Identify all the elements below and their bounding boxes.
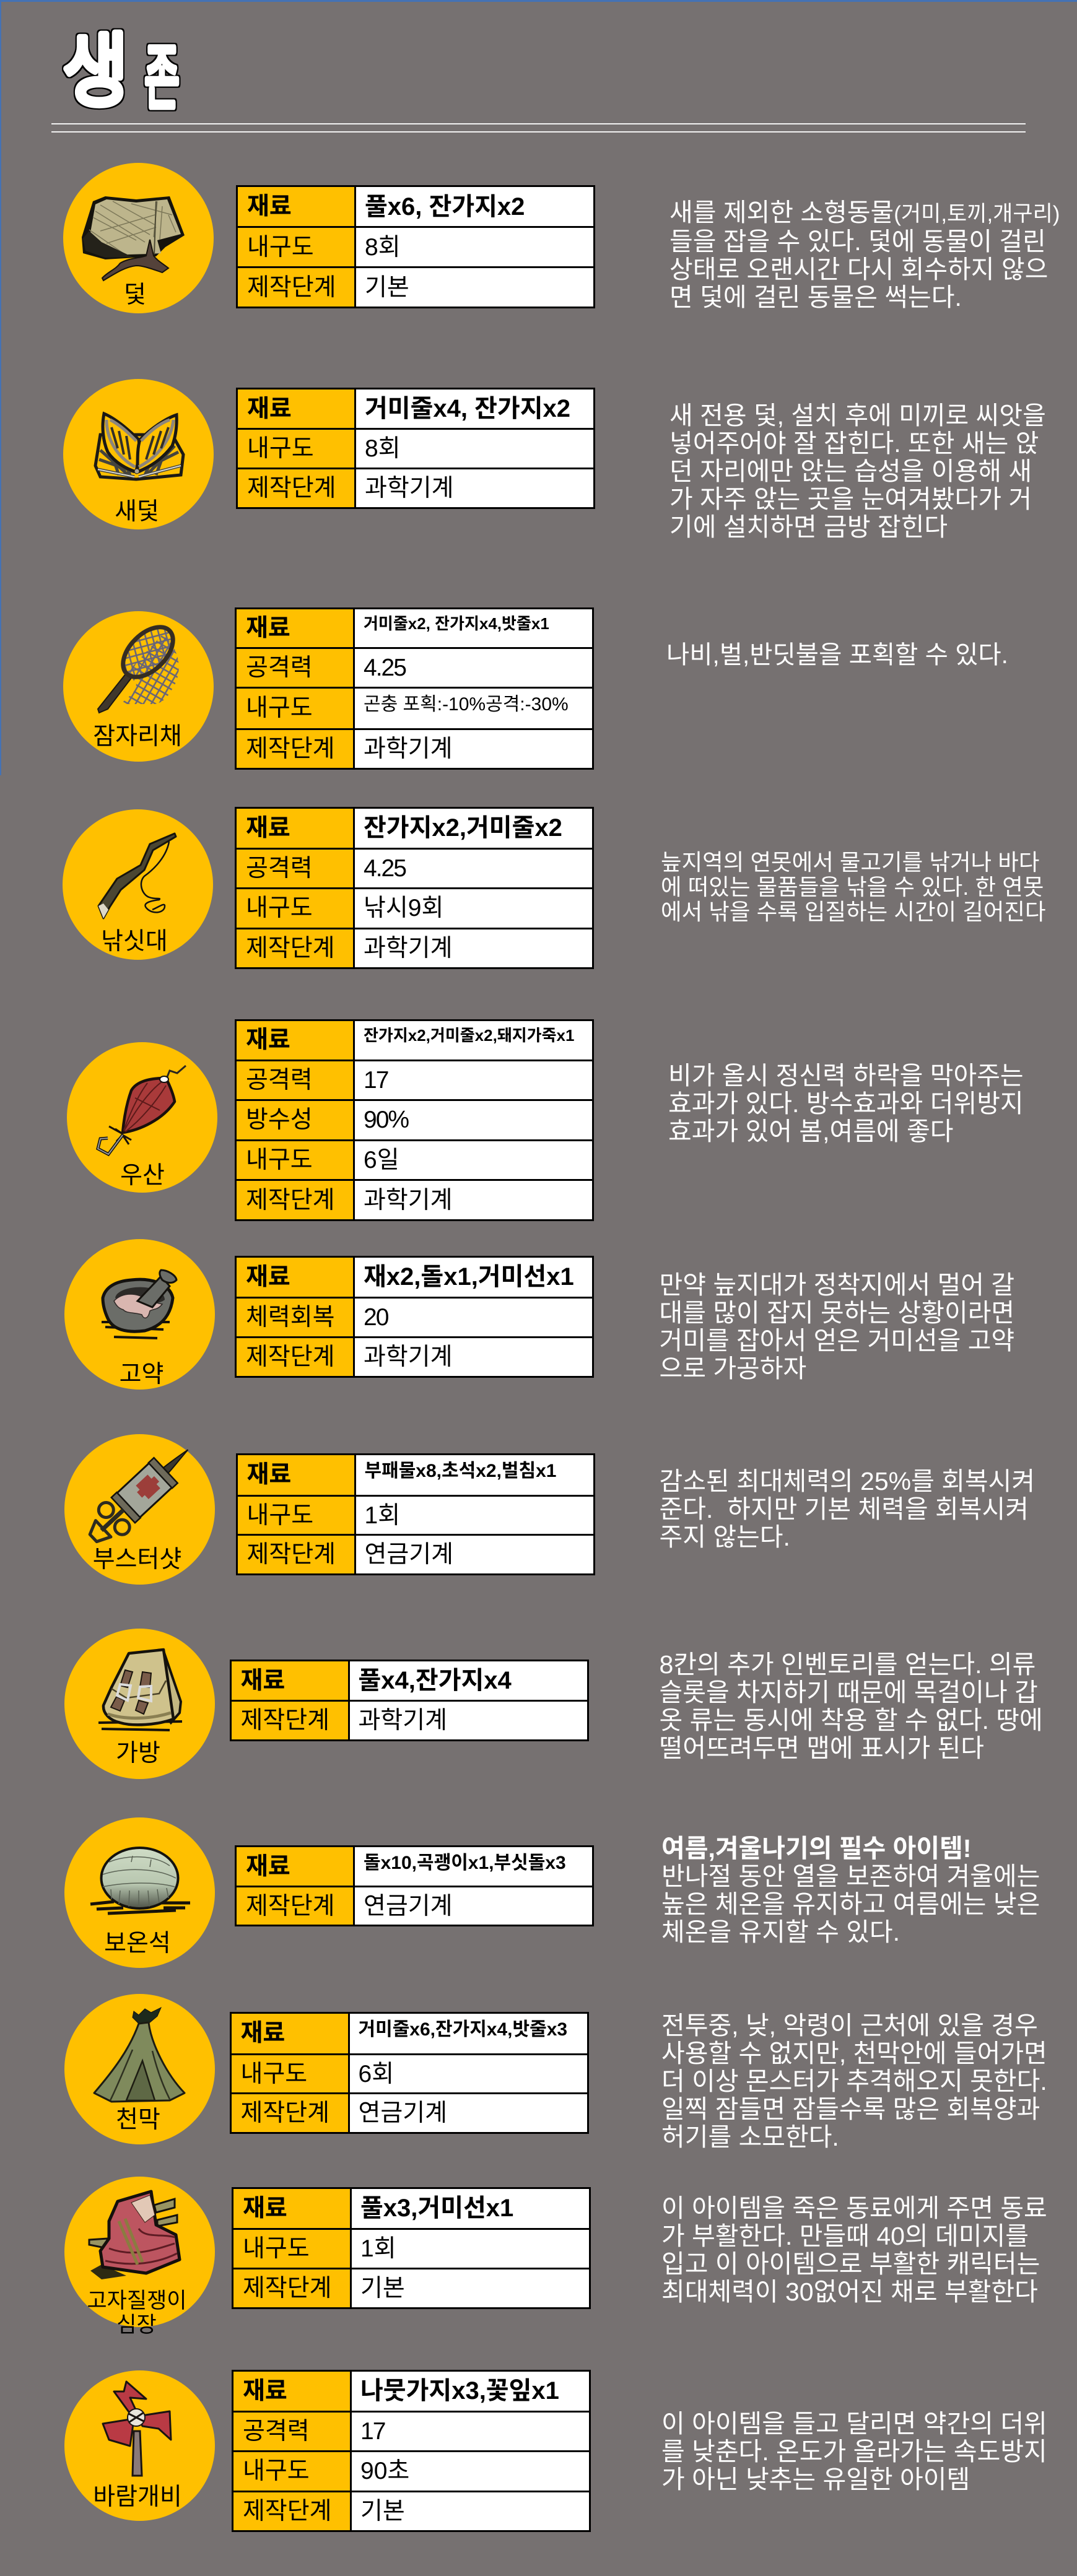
table: 가방: 재료 bbox=[240, 1668, 285, 1694]
icon badge: 가방 bbox=[64, 1629, 215, 1779]
label: 가방 bbox=[116, 1740, 160, 1767]
icon badge: 천막 bbox=[64, 1994, 215, 2144]
panel: 덫 bbox=[63, 163, 1060, 313]
table: 고자질쟁이 심장: 제작단계 bbox=[243, 2275, 332, 2302]
label: 천막 bbox=[116, 2107, 160, 2133]
icon badge: 낚싯대 bbox=[63, 809, 213, 960]
table: 부스터샷: 부패물x8,초석x2,벌침x1 bbox=[364, 1461, 556, 1481]
table: 바람개비: 나뭇가지x3,꽃잎x1 bbox=[360, 2377, 559, 2404]
table: 부스터샷: 1회 bbox=[364, 1502, 400, 1529]
table: 잠자리채: 거미줄x2, 잔가지x4,밧줄x1 bbox=[364, 614, 549, 633]
table: 바람개비: 재료 bbox=[243, 2378, 287, 2404]
table: 낚싯대: 낚시9회 bbox=[364, 895, 443, 921]
table: 부스터샷: 연금기계 bbox=[364, 1541, 453, 1568]
panel: 낚싯대 bbox=[63, 807, 1046, 969]
table: 낚싯대: 과학기계 bbox=[364, 935, 453, 962]
label: 덫 bbox=[124, 282, 146, 308]
panel: 고약 bbox=[64, 1239, 1014, 1390]
table: 보온석: 연금기계 bbox=[364, 1893, 453, 1920]
table: 고자질쟁이 심장: 재료 bbox=[243, 2195, 287, 2222]
label: 바람개비 bbox=[93, 2484, 181, 2510]
table: 낚싯대 bbox=[235, 807, 594, 969]
table: 우산: 6일 bbox=[364, 1147, 399, 1173]
table: 잠자리채: 4.25 bbox=[364, 655, 406, 681]
table: 낚싯대: 내구도 bbox=[246, 895, 313, 921]
table: 새덫: 과학기계 bbox=[365, 475, 454, 502]
title bbox=[62, 27, 181, 118]
table: 고자질쟁이 심장: 내구도 bbox=[243, 2235, 310, 2262]
table: 천막: 거미줄x6,잔가지x4,밧줄x3 bbox=[358, 2019, 567, 2040]
table: 잠자리채: 재료 bbox=[246, 615, 290, 642]
description: 새 전용 덫, 설치 후에 미끼로 씨앗을 넣어주어야 잘 잡힌다. 또한 새는 앉 던 자리에만 앉는 습성을 이용해 새 가 자주 앉는 곳을 눈여겨봤다가 거 기에 설치하면 금방 잡힌다 bbox=[669, 401, 1046, 541]
icon: fishing rod bbox=[98, 833, 176, 918]
table: 바람개비: 90초 bbox=[360, 2458, 409, 2484]
table: 낚싯대: 공격력 bbox=[246, 855, 313, 882]
icon: mortar and pestle bbox=[102, 1270, 176, 1338]
panel: 잠자리채 bbox=[63, 607, 1008, 770]
table: 우산: 제작단계 bbox=[246, 1187, 335, 1214]
table: 잠자리채: 내구도 bbox=[246, 695, 313, 721]
table: 보온석: 돌x10,곡괭이x1,부싯돌x3 bbox=[364, 1853, 566, 1873]
description: 이 아이템을 죽은 동료에게 주면 동료 가 부활한다. 만들때 40의 데미지를 입고 이 아이템으로 부활한 캐릭터는 최대체력이 30없어진 채로 부활한다 bbox=[661, 2194, 1047, 2306]
table: 고약 bbox=[235, 1256, 594, 1378]
table: 우산 bbox=[235, 1019, 594, 1221]
table: 천막: 재료 bbox=[240, 2020, 285, 2047]
icon badge: 바람개비 bbox=[64, 2370, 215, 2521]
icon badge: 덫 bbox=[63, 163, 214, 313]
table: 바람개비 bbox=[232, 2370, 591, 2532]
table: 천막 bbox=[229, 2012, 588, 2134]
icon badge: 새덫 bbox=[63, 379, 214, 529]
table: 부스터샷: 재료 bbox=[246, 1461, 291, 1488]
table: 새덫: 8회 bbox=[365, 435, 401, 462]
table: 잠자리채: 과학기계 bbox=[364, 736, 453, 762]
label: 보온석 bbox=[104, 1930, 170, 1957]
table: 새덫: 재료 bbox=[247, 396, 292, 422]
icon: tent bbox=[94, 2008, 185, 2102]
description: 감소된 최대체력의 25%를 회복시켜 준다. 하지만 기본 체력을 회복시켜 주지 않는다. bbox=[659, 1467, 1035, 1551]
panel: 가방 bbox=[64, 1629, 1043, 1779]
table: 보온석: 재료 bbox=[246, 1853, 290, 1880]
table: 고약: 재료 bbox=[246, 1264, 290, 1290]
table: 우산: 내구도 bbox=[246, 1147, 313, 1173]
table: 새덫: 내구도 bbox=[247, 435, 314, 462]
icon badge: 우산 bbox=[67, 1042, 217, 1193]
table: 덫: 내구도 bbox=[247, 234, 314, 261]
table: 부스터샷: 내구도 bbox=[246, 1502, 313, 1529]
table: 고약: 과학기계 bbox=[364, 1344, 453, 1370]
icon badge: 잠자리채 bbox=[63, 611, 214, 762]
icon badge: 부스터샷 bbox=[64, 1434, 215, 1585]
panel: 바람개비 bbox=[64, 2370, 1047, 2532]
table: 새덫: 거미줄x4, 잔가지x2 bbox=[365, 395, 570, 422]
table: 낚싯대: 제작단계 bbox=[246, 935, 335, 962]
table: 바람개비: 기본 bbox=[360, 2498, 405, 2525]
description: 늪지역의 연못에서 물고기를 낚거나 바다 에 떠있는 물품들을 낚을 수 있다. 한 연못 에서 낚을 수록 입질하는 시간이 길어진다 bbox=[661, 850, 1046, 925]
table: 덫 bbox=[236, 185, 595, 308]
table: 천막: 제작단계 bbox=[240, 2100, 329, 2126]
panel: 우산 bbox=[67, 1019, 1024, 1221]
table: 잠자리채: 공격력 bbox=[246, 655, 313, 681]
table: 고약: 재x2,돌x1,거미선x1 bbox=[364, 1263, 574, 1290]
table: 보온석 bbox=[235, 1845, 594, 1926]
description: 이 아이템을 들고 달리면 약간의 더위 를 낮춘다. 온도가 올라가는 속도방지 가 아닌 낮추는 유일한 아이템 bbox=[661, 2409, 1047, 2494]
label: 부스터샷 bbox=[92, 1546, 181, 1573]
icon: thermal stone bbox=[90, 1848, 190, 1913]
table: 바람개비: 제작단계 bbox=[243, 2498, 332, 2525]
table: 고자질쟁이 심장 bbox=[232, 2187, 591, 2309]
table: 덫: 풀x6, 잔가지x2 bbox=[365, 193, 525, 220]
table: 낚싯대: 잔가지x2,거미줄x2 bbox=[364, 814, 562, 842]
table: 덫: 재료 bbox=[247, 193, 292, 220]
description: 만약 늪지대가 정착지에서 멀어 갈 대를 많이 잡지 못하는 상황이라면 거미를 잡아서 얻은 거미선을 고약 으로 가공하자 bbox=[659, 1271, 1014, 1383]
label: 우산 bbox=[120, 1162, 165, 1189]
table: 덫: 기본 bbox=[365, 274, 409, 301]
table: 고약: 20 bbox=[364, 1304, 388, 1331]
table: 우산: 재료 bbox=[246, 1027, 290, 1053]
icon badge: 보온석 bbox=[64, 1817, 215, 1968]
icon: trap bbox=[82, 196, 185, 281]
panel: 부스터샷 bbox=[64, 1434, 1035, 1585]
table: 우산: 과학기계 bbox=[364, 1187, 453, 1214]
table: 덫: 8회 bbox=[365, 234, 401, 261]
icon badge: 고자질쟁이 심장 bbox=[64, 2177, 215, 2337]
label: 잠자리채 bbox=[93, 723, 182, 750]
label: 새덫 bbox=[115, 498, 159, 525]
icon: bug net bbox=[98, 618, 182, 713]
table: 가방: 제작단계 bbox=[240, 1707, 329, 1734]
table: 부스터샷: 제작단계 bbox=[246, 1541, 336, 1568]
label: 심장 bbox=[116, 2313, 156, 2337]
table: 우산: 90% bbox=[364, 1107, 408, 1133]
table: 고약: 제작단계 bbox=[246, 1344, 335, 1370]
icon: backpack bbox=[98, 1650, 182, 1730]
table: 바람개비: 17 bbox=[360, 2418, 385, 2445]
table: 천막: 연금기계 bbox=[358, 2100, 447, 2126]
panel: 고자질쟁이 심장 bbox=[64, 2177, 1047, 2337]
table: 고자질쟁이 심장: 풀x3,거미선x1 bbox=[360, 2195, 513, 2222]
label: 고약 bbox=[119, 1361, 164, 1388]
description: 새를 제외한 소형동물(거미,토끼,개구리) 들을 잡을 수 있다. 덫에 동물이 걸린 상태로 오랜시간 다시 회수하지 않으 면 덫에 걸린 동물은 썩는다. bbox=[669, 198, 1060, 311]
description: 전투중, 낮, 악령이 근처에 있을 경우 사용할 수 없지만, 천막안에 들어가면 더 이상 몬스터가 추격해오지 못한다. 일찍 잠들면 잠들수록 많은 회복양과 허기를 소모한다. bbox=[661, 2011, 1047, 2151]
panel: 보온석 bbox=[64, 1817, 1040, 1968]
table: 고자질쟁이 심장: 1회 bbox=[360, 2235, 396, 2262]
table: 우산: 17 bbox=[364, 1067, 388, 1094]
table: 우산: 공격력 bbox=[246, 1067, 313, 1094]
table: 바람개비: 공격력 bbox=[243, 2418, 310, 2445]
panel: 새덫 bbox=[63, 379, 1046, 541]
icon: umbrella bbox=[98, 1066, 186, 1154]
icon: bird trap bbox=[95, 414, 183, 479]
table: 잠자리채 bbox=[235, 607, 594, 770]
table: 가방 bbox=[229, 1660, 588, 1741]
table: 가방: 과학기계 bbox=[358, 1707, 447, 1734]
label: 고자질쟁이 bbox=[87, 2289, 186, 2313]
icon: pinwheel bbox=[103, 2382, 171, 2476]
table: 고약: 체력회복 bbox=[246, 1304, 335, 1331]
table: 새덫 bbox=[236, 388, 595, 509]
icon: syringe bbox=[80, 1436, 201, 1552]
description: 나비,벌,반딧불을 포획할 수 있다. bbox=[666, 640, 1008, 669]
table: 덫: 제작단계 bbox=[247, 274, 336, 301]
description: 비가 올시 정신력 하락을 막아주는 효과가 있다. 방수효과와 더위방지 효과가 있어 봄,여름에 좋다 bbox=[668, 1061, 1024, 1146]
description: 8칸의 추가 인벤토리를 얻는다. 의류 슬롯을 차지하기 때문에 목걸이나 갑 옷 류는 동시에 착용 할 수 없다. 땅에 떨어뜨려두면 맵에 표시가 된다 bbox=[659, 1650, 1043, 1762]
table: 잠자리채: 곤충 포획:-10%공격:-30% bbox=[364, 694, 569, 715]
table: 새덫: 제작단계 bbox=[247, 475, 336, 502]
description: 여름,겨울나기의 필수 아이템! 반나절 동안 열을 보존하여 겨울에는 높은 체온을 유지하고 여름에는 낮은 체온을 유지할 수 있다. bbox=[661, 1834, 1040, 1946]
title: 생 bbox=[63, 27, 128, 117]
table: 천막: 6회 bbox=[358, 2061, 394, 2087]
table: 우산: 방수성 bbox=[246, 1107, 313, 1133]
table: 낚싯대: 재료 bbox=[246, 815, 290, 842]
label: 낚싯대 bbox=[101, 928, 168, 955]
title: 존 bbox=[144, 38, 180, 118]
table: 가방: 풀x4,잔가지x4 bbox=[358, 1667, 512, 1694]
table: 잠자리채: 제작단계 bbox=[246, 736, 335, 762]
icon: telltale heart bbox=[89, 2191, 180, 2279]
icon badge: 고약 bbox=[64, 1239, 215, 1390]
table: 부스터샷 bbox=[235, 1453, 595, 1575]
table: 낚싯대: 4.25 bbox=[364, 855, 406, 882]
table: 고자질쟁이 심장: 기본 bbox=[360, 2275, 405, 2302]
table: 천막: 내구도 bbox=[240, 2061, 307, 2087]
table: 바람개비: 내구도 bbox=[243, 2458, 310, 2484]
panel: 천막 bbox=[64, 1994, 1047, 2151]
table: 보온석: 제작단계 bbox=[246, 1893, 335, 1920]
table: 우산: 잔가지x2,거미줄x2,돼지가죽x1 bbox=[364, 1026, 574, 1045]
